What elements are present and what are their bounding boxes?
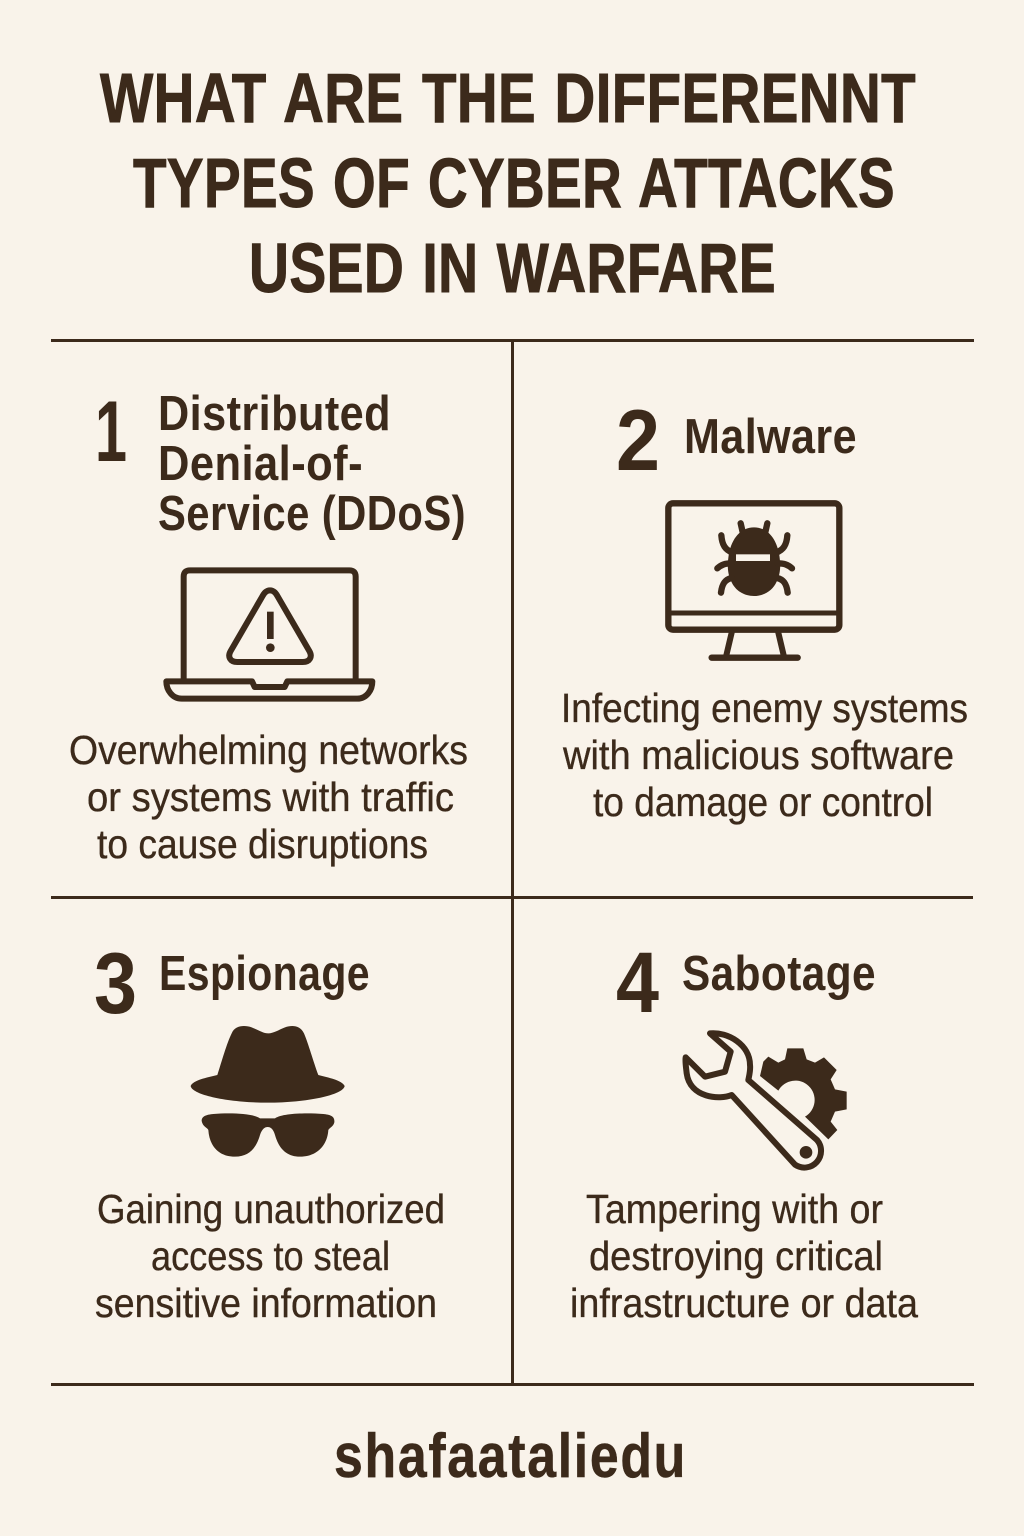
- description: Espionage: [95, 1186, 445, 1326]
- description: Sabotage: destroying critical: [589, 1233, 883, 1279]
- heading: DDoS: Distributed: [158, 387, 391, 441]
- description: DDoS: [69, 727, 468, 867]
- description: Malware: [561, 685, 968, 825]
- heading: DDoS: Service (DDoS): [158, 487, 466, 541]
- number 3: 3: [94, 936, 137, 1032]
- panel: Sabotage: [570, 935, 918, 1326]
- heading: Sabotage: Sabotage: [682, 947, 876, 1001]
- description: Sabotage: [570, 1186, 918, 1326]
- description: Espionage: access to steal: [151, 1233, 390, 1279]
- number 4: 4: [616, 935, 659, 1031]
- heading: DDoS: Denial-of-: [158, 437, 363, 491]
- heading: Espionage: Espionage: [159, 947, 370, 1001]
- description: Espionage: sensitive information: [95, 1280, 437, 1326]
- description: Malware: with malicious software: [562, 732, 954, 778]
- title: USED IN WARFARE: [249, 229, 776, 307]
- description: Malware: Infecting enemy systems: [561, 685, 968, 731]
- number 2: 2: [616, 393, 660, 489]
- panel: Malware: [561, 393, 968, 825]
- icon: hat and sunglasses: [191, 1026, 345, 1157]
- footer brand: shafaataliedu: [334, 1422, 687, 1491]
- panel: Espionage: [94, 936, 445, 1326]
- icon: monitor with bug: [668, 503, 839, 658]
- description: Malware: to damage or control: [593, 779, 933, 825]
- icon: wrench and gear: [685, 1033, 847, 1168]
- description: Sabotage: infrastructure or data: [570, 1280, 918, 1326]
- description: DDoS: Overwhelming networks: [69, 727, 468, 773]
- title: [100, 59, 916, 307]
- description: DDoS: or systems with traffic: [87, 774, 454, 820]
- icon: laptop with warning triangle: [166, 570, 372, 699]
- number 1: 1: [95, 384, 127, 480]
- description: DDoS: to cause disruptions: [97, 821, 428, 867]
- heading: Malware: Malware: [684, 410, 857, 464]
- description: Espionage: Gaining unauthorized: [97, 1186, 445, 1232]
- description: Sabotage: Tampering with or: [586, 1186, 883, 1232]
- heading: DDoS: [158, 387, 466, 541]
- panel: DDoS: [69, 384, 468, 867]
